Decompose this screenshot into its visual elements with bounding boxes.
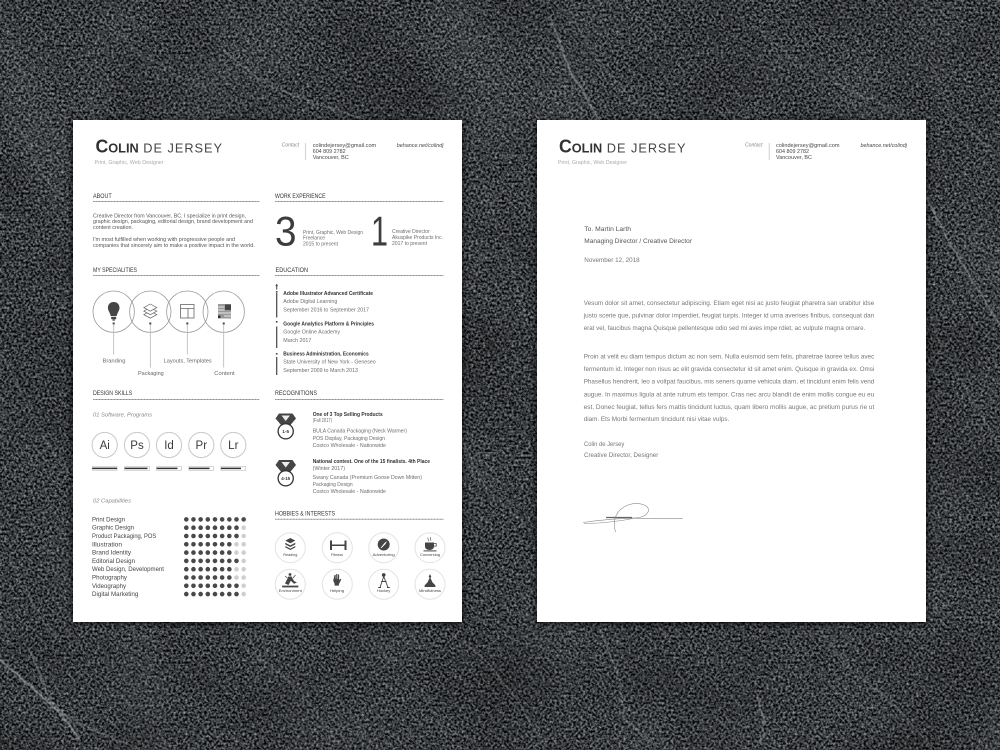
letter paragraph 2: diam. Ets Morbi fermentum tincidunt nisi vitae vulps. [584, 416, 730, 423]
work experience section [275, 194, 444, 254]
icon: conversing [424, 537, 436, 551]
resume contact block: colindejersey@gmail.com [313, 143, 376, 149]
design skills section: DESIGN SKILLS [93, 391, 132, 397]
letter header name [558, 136, 686, 166]
specialities labels [102, 358, 235, 377]
education entry 1 [283, 291, 373, 313]
icon: environment [282, 573, 298, 587]
recognition 2 text: National contest. One of the 15 finalists. 4th Place [313, 459, 430, 465]
capability dot ratings [186, 519, 244, 594]
education entry 3: Business Administration, Economics [283, 351, 369, 357]
hobby rings [275, 533, 445, 599]
hobby labels: Conversing [420, 553, 440, 557]
letter paragraph 1 [583, 300, 875, 332]
letter addressee [584, 226, 693, 264]
specialities circles and leader lines [93, 291, 244, 368]
hobby labels: Adventuring [373, 553, 395, 557]
icon: reading [285, 538, 295, 550]
education entry 1: September 2016 to September 2017 [283, 307, 369, 313]
resume contact block: 604 809 2782 [313, 149, 346, 155]
resume header name [94, 136, 223, 166]
education entry 1: Adobe Digital Learning [283, 299, 337, 305]
specialities labels: Content [214, 371, 235, 377]
hobby labels: Hockey [377, 589, 390, 593]
recognition 2 text: Packaging Design [313, 482, 353, 488]
recognition 1 text: BULA Canada Packaging (Neck Warmer) [313, 428, 407, 434]
design skills section [92, 391, 260, 598]
capability names: Photography [92, 576, 127, 582]
about section: companies that sincerely aim to make a positive impact in the world. [93, 243, 255, 249]
letter paragraph 2: augue. In maximus ligula at ante rutrum ets tempor. Cras nec arcu blandit de enim mollis congue eu eu [584, 391, 875, 398]
capability names: Web Design, Development [92, 567, 164, 573]
letter paragraph 1: Vesum dolor sit amet, consectetur adipiscing. Etiam eget nisi ac justo feugiat pharetra san urabitur idse [584, 300, 875, 307]
resume header name: COLIN DE JERSEY [96, 136, 223, 156]
software names: Pr [196, 440, 207, 452]
cover letter page [535, 120, 928, 625]
hobby labels: Reading [283, 553, 297, 557]
stat: 3 years: 3 [275, 208, 296, 254]
icon: medal 1-5: 1-5 [282, 429, 289, 434]
software names: Ai [100, 440, 110, 452]
education entry 2 [283, 321, 374, 344]
education timeline [275, 284, 278, 375]
capability names: Product Packaging, POS [92, 534, 156, 540]
icon: hockey [378, 574, 390, 588]
recognition 2 text: Costco Wholesale - Nationwide [313, 489, 386, 495]
hobby labels: Environment [279, 589, 303, 593]
letter paragraph 2: est. Donec feugiat, tellus fers mattis tincidunt luctus, quam libero mollis augue, ac pretium purus rie ut [584, 404, 875, 411]
letter paragraph 1: erat vel, faucibus magna Quisque pellentesque odio sed mi aves impe rdiet, ac vulpute magna ornare. [584, 325, 866, 332]
resume contact block: Contact [282, 143, 300, 149]
recognition 1 text: Costco Wholesale - Nationwide [313, 443, 386, 449]
education entry 1: Adobe Illustrator Advanced Certificate [283, 291, 373, 297]
stat: 1 year [371, 208, 443, 254]
specialities labels: Layouts, Templates [164, 358, 212, 364]
letter paragraph 2: Phasellus hendrerit, leo a voltpat faucibus, mis seners quame vehicula diam, et tincidunt enim felis vend [584, 379, 875, 386]
letter contact block: 604 809 2782 [776, 149, 809, 155]
resume page [71, 120, 464, 625]
capability names: Illustration [92, 542, 122, 548]
capability names: Digital Marketing [92, 592, 138, 598]
software names: Id [164, 440, 174, 452]
capability names: Print Design [92, 517, 125, 523]
stat: 3 years: 2015 to present [303, 242, 339, 248]
recognition 1 text [313, 412, 407, 449]
capability names: Videography [92, 584, 126, 590]
resume contact block: Vancouver, BC [313, 155, 349, 161]
stat: 3 years [275, 208, 363, 254]
icon: light bulb [108, 302, 120, 321]
design skills section: 02 Capabilities [93, 498, 131, 504]
stat: 1 year: 2017 to present [392, 241, 428, 247]
resume content [92, 136, 445, 599]
work experience section: WORK EXPERIENCE [275, 194, 326, 200]
recognitions section: RECOGNITIONS [275, 391, 317, 397]
icon: medal 4-15: 4-15 [281, 476, 291, 481]
icon: mindfulness [425, 574, 435, 587]
capability names: Brand Identity [92, 551, 131, 557]
about section: graphic design, packaging, editorial design, brand development and [93, 219, 253, 225]
recognition 2 text [313, 459, 430, 495]
letter paragraph 2: fermentum id. Integer non risus ac elit gravida consectetur id sit amet enim. Quisque in gravida ex. Omsi [584, 366, 874, 373]
leader dots [113, 322, 225, 324]
hobby labels [279, 553, 441, 593]
software names: Ps [130, 440, 144, 452]
letter content [558, 136, 908, 532]
icon: content grid [218, 304, 231, 318]
software rings [92, 432, 246, 458]
software skill bars [92, 466, 246, 470]
software names: Lr [228, 440, 239, 452]
letter addressee: November 12, 2018 [584, 257, 640, 264]
capability names: Graphic Design [92, 526, 134, 532]
stat: 1 year: Akuspike Products Inc. [392, 235, 443, 241]
resume contact block: behance.net/colindj [397, 143, 444, 149]
letter sign-off: Colin de Jersey [584, 441, 625, 448]
design skills section: 01 Software, Programs [93, 412, 152, 418]
letter header name: COLIN DE JERSEY [559, 136, 686, 156]
letter paragraph 1: justo scerie que, pulvinar dolor imperdiet, feugiat turpis. Integer id urna averises finibus, consequat dan [583, 313, 875, 320]
icon: medal 4-15 [276, 460, 296, 486]
recognition 1 text: POS Display, Packaging Design [313, 436, 385, 442]
letter sign-off [584, 441, 659, 459]
specialities labels: Branding [102, 358, 126, 364]
letter contact block: Contact [745, 143, 763, 149]
education entry 2: March 2017 [283, 338, 311, 344]
hobby labels: Mindfulness [419, 589, 441, 593]
hobbies and interests section: HOBBIES & INTERESTS [275, 511, 335, 517]
stat: 3 years: Freelance [303, 236, 325, 242]
about section: content creation. [93, 225, 133, 231]
stat: 1 year: Creative Director [392, 229, 430, 235]
software names [100, 440, 239, 452]
capability names [92, 517, 164, 598]
education entry 2: Google Online Academy [283, 330, 340, 336]
recognition 1 text: (Fall 2017) [313, 418, 332, 424]
letter paragraph 2: Proin at velit eu diam tempus dictum ac non sem. Nulla euismod sem felis, pharetrae laoree tellus avec [584, 353, 875, 360]
resume contact block [282, 143, 444, 161]
letter addressee: To. Martin Larth [584, 226, 631, 233]
resume paper [73, 120, 462, 622]
education entry 3: State University of New York - Geneseo [283, 360, 376, 366]
icon: fitness [330, 540, 346, 550]
letter addressee: Managing Director / Creative Director [584, 238, 693, 245]
education entry 2: Google Analytics Platform & Principles [283, 321, 374, 327]
icon: helping [333, 574, 341, 586]
about section: Creative Director from Vancouver, BC. I specialize in print design, [93, 214, 246, 220]
capability names: Editorial Design [92, 559, 135, 565]
resume header name: Print, Graphic, Web Designer [94, 160, 164, 166]
letter paper [537, 120, 926, 622]
hobby labels: Helping [330, 589, 344, 593]
recognition 2 text: (Winter 2017) [313, 466, 345, 472]
hobby labels: Fitness [331, 553, 343, 557]
letter contact block: behance.net/colindj [860, 143, 908, 149]
about section: I'm most fulfilled when working with progressive people and [93, 237, 235, 243]
icon: adventuring [378, 538, 390, 550]
letter header name: Print, Graphic, Web Designer [558, 160, 627, 166]
signature [583, 504, 683, 532]
education section: EDUCATION [276, 268, 308, 274]
stat: 3 years: Print, Graphic, Web Design [303, 230, 363, 236]
letter contact block [745, 143, 908, 161]
stat: 1 year: 1 [371, 208, 388, 254]
recognition 2 text: Swany Canada (Premium Goose Down Mitten) [313, 475, 422, 481]
letter contact block: colindejersey@gmail.com [776, 143, 840, 149]
my specialities section [93, 268, 260, 377]
about section [93, 194, 260, 249]
hobbies and interests section [275, 511, 445, 599]
recognition 1 text: One of 3 Top Selling Products [313, 412, 383, 418]
about section: ABOUT [93, 194, 112, 200]
icon: layers [144, 304, 157, 318]
specialities labels: Packaging [138, 371, 164, 377]
recognitions section [275, 391, 444, 495]
letter paragraph 2 [584, 353, 875, 423]
education entry 3: September 2009 to March 2013 [283, 368, 358, 374]
my specialities section: MY SPECIALITIES [93, 268, 137, 274]
icon: layout template [180, 304, 194, 318]
icon: medal 1-5 [276, 414, 296, 439]
education section [275, 268, 444, 375]
education entry 3 [283, 351, 376, 374]
letter contact block: Vancouver, BC [776, 155, 812, 161]
letter sign-off: Creative Director, Designer [584, 452, 659, 459]
